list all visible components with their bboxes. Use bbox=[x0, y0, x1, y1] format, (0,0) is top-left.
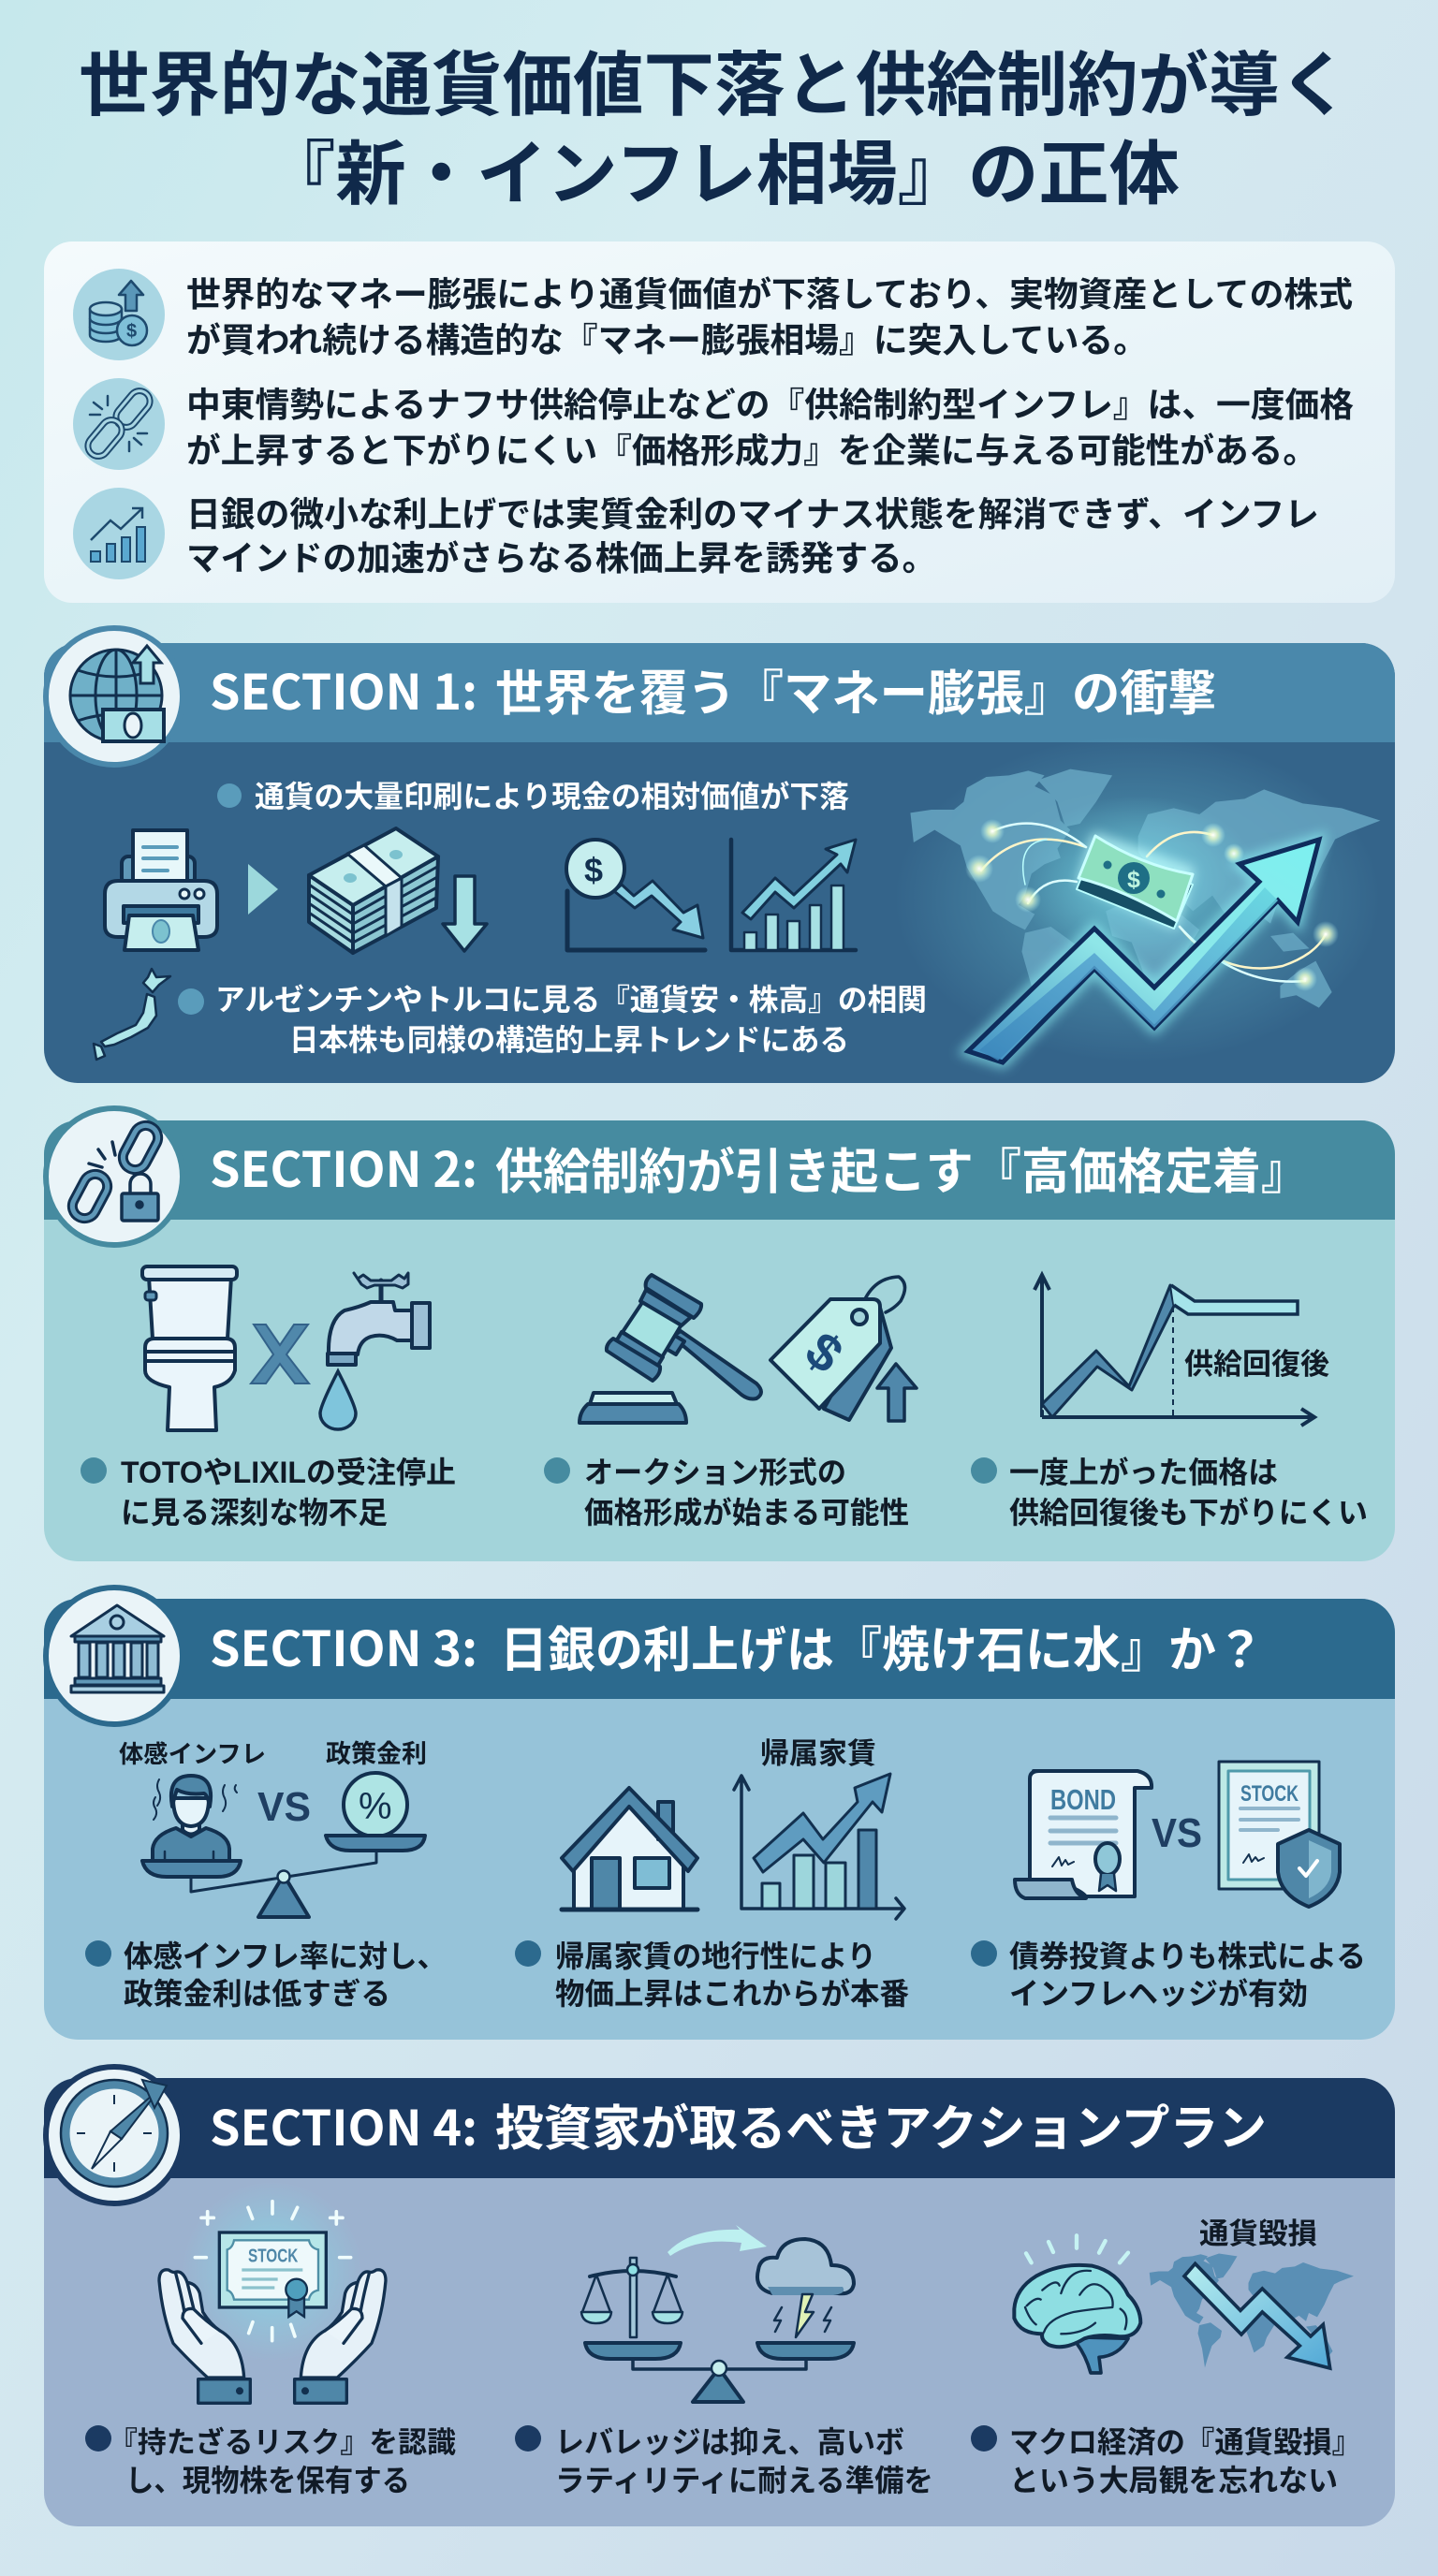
icon: coins and up arrow bbox=[73, 269, 165, 360]
icon: compass bbox=[46, 2067, 183, 2203]
bullet: auction pricing: 価格形成が始まる可能性 bbox=[584, 1496, 909, 1530]
summary point 2 bbox=[186, 386, 1354, 470]
label: felt inflation: 体感インフレ bbox=[119, 1740, 266, 1768]
label: imputed rent: 帰属家賃 bbox=[760, 1737, 876, 1770]
panel: section 4 bbox=[44, 2067, 1395, 2526]
icon: balance scale and storm cloud bbox=[581, 2225, 854, 2402]
icon: cross bbox=[251, 1325, 309, 1383]
label: VS: VS bbox=[1152, 1810, 1202, 1856]
icon: stock certificate with shield bbox=[1219, 1762, 1340, 1907]
icon: down arrow bbox=[443, 876, 487, 951]
label: VS: VS bbox=[257, 1784, 311, 1830]
summary point 1: が買われ続ける構造的な『マネー膨張相場』に突入している。 bbox=[186, 321, 1148, 359]
section 1 heading: 世界を覆う『マネー膨張』の衝撃 bbox=[495, 667, 1216, 722]
icon: falling dollar chart: $ bbox=[584, 851, 603, 889]
icon: map of Japan bbox=[94, 969, 170, 1060]
section 2 heading bbox=[210, 1131, 1309, 1201]
summary point 3: 日銀の微小な利上げでは実質金利のマイナス状態を解消できず、インフレ bbox=[186, 495, 1319, 534]
left hand bbox=[159, 2270, 250, 2403]
icon: gavel bbox=[580, 1275, 761, 1423]
icon: up arrow bbox=[877, 1364, 917, 1421]
icon: falling dollar chart bbox=[566, 840, 705, 950]
chart: price stays high after supply recovery: 供給回復後 bbox=[1184, 1348, 1329, 1381]
bullet: risk of not holding: し、現物株を保有する bbox=[125, 2464, 410, 2497]
chart: imputed rent rising bbox=[734, 1774, 904, 1919]
title: 『新・インフレ相場』の正体 bbox=[265, 135, 1180, 213]
section 3 heading: SECTION 3: bbox=[210, 1610, 477, 1680]
icon: toilet bbox=[142, 1266, 237, 1430]
summary point 3: マインドの加速がさらなる株価上昇を誘発する。 bbox=[186, 539, 936, 578]
bullet: printing: 通貨の大量印刷により現金の相対価値が下落 bbox=[255, 780, 849, 813]
icon: world map with falling arrow bbox=[1150, 2253, 1354, 2368]
bullet: stocks over bonds: 債券投資よりも株式による bbox=[1009, 1939, 1366, 1973]
icon: rising bar chart bbox=[731, 840, 856, 950]
section 2 heading: 供給制約が引き起こす『高価格定着』 bbox=[495, 1146, 1309, 1200]
section 4 heading: 投資家が取るべきアクションプラン bbox=[495, 2102, 1267, 2157]
bullet: leverage restraint: ラティリティに耐える準備を bbox=[555, 2464, 933, 2497]
icon: brain bbox=[1014, 2235, 1140, 2373]
bullet: risk of not holding: 『持たざるリスク』を認識 bbox=[109, 2426, 456, 2459]
bullet: leverage restraint: レバレッジは抑え、高いボ bbox=[555, 2425, 904, 2459]
bullet: Argentina and Turkey: 日本株も同様の構造的上昇トレンドにある bbox=[289, 1023, 849, 1057]
title: 世界的な通貨価値下落と供給制約が導く bbox=[79, 46, 1350, 124]
banknote: $ bbox=[1127, 867, 1140, 893]
summary point 1: 世界的なマネー膨張により通貨価値が下落しており、実物資産としての株式 bbox=[186, 275, 1353, 314]
icon: globe and banknote bbox=[46, 628, 183, 765]
icon: house bbox=[562, 1788, 697, 1910]
bullet: big picture: という大局観を忘れない bbox=[1009, 2464, 1338, 2497]
icon: stock certificate with shield: STOCK bbox=[1240, 1781, 1299, 1807]
icon: price tag: $ bbox=[795, 1320, 854, 1384]
bullet: TOTO and LIXIL: TOTOやLIXILの受注停止 bbox=[121, 1456, 456, 1489]
panel: section 3 bbox=[44, 1588, 1395, 2040]
bullet: Argentina and Turkey: アルゼンチンやトルコに見る『通貨安・株高』の相関 bbox=[215, 983, 927, 1017]
panel: section 2 bbox=[44, 1108, 1395, 1561]
summary point 1 bbox=[186, 275, 1353, 359]
bullet: Argentina and Turkey bbox=[178, 983, 927, 1057]
label: currency debasement: 通貨毀損 bbox=[1199, 2217, 1317, 2250]
arrow: printer to money bbox=[248, 864, 278, 915]
icon: broken chain and lock bbox=[46, 1108, 183, 1245]
bullet: risk of not holding bbox=[85, 2425, 456, 2497]
section 1 heading: SECTION 1: bbox=[210, 653, 477, 724]
bullet: auction pricing: オークション形式の bbox=[584, 1456, 846, 1489]
icon: stack of banknotes bbox=[309, 828, 438, 953]
icon: bond certificate: BOND bbox=[1050, 1783, 1116, 1816]
bullet: imputed rent lag: 帰属家賃の地行性により bbox=[555, 1939, 876, 1973]
icon: faucet bbox=[328, 1273, 430, 1365]
panel: section 3: % bbox=[359, 1786, 392, 1827]
bullet: felt inflation vs policy rate: 体感インフレ率に対し、 bbox=[124, 1939, 447, 1973]
right hand bbox=[295, 2270, 386, 2403]
icon: bars and rising line bbox=[73, 488, 165, 579]
summary point 2: 中東情勢によるナフサ供給停止などの『供給制約型インフレ』は、一度価格 bbox=[186, 386, 1354, 424]
section 3 heading bbox=[210, 1610, 1264, 1680]
icon: hands holding stock certificate: STOCK bbox=[248, 2246, 299, 2266]
section 1 heading bbox=[210, 653, 1216, 724]
bullet: big picture: マクロ経済の『通貨毀損』 bbox=[1009, 2425, 1361, 2459]
illustration: world map with money and rising arrow bbox=[894, 735, 1381, 1062]
bullet: sticky prices: 一度上がった価格は bbox=[1009, 1456, 1278, 1489]
rising arrow bbox=[968, 840, 1319, 1062]
panel: section 1 bbox=[44, 628, 1395, 1083]
section 4 heading: SECTION 4: bbox=[210, 2089, 477, 2159]
bullet: big picture bbox=[971, 2425, 1361, 2497]
bullet: sticky prices: 供給回復後も下がりにくい bbox=[1009, 1496, 1368, 1530]
icon: tilted scale, person vs interest rate bbox=[142, 1773, 425, 1917]
icon: price tag bbox=[770, 1277, 905, 1420]
icon: coins and up arrow: $ bbox=[126, 321, 137, 342]
summary point 2: が上昇すると下がりにくい『価格形成力』を企業に与える可能性がある。 bbox=[186, 432, 1317, 470]
bullet: leverage restraint bbox=[515, 2425, 933, 2497]
bullet: felt inflation vs policy rate bbox=[85, 1939, 447, 2011]
bullet: stocks over bonds bbox=[971, 1939, 1366, 2011]
bullet: auction pricing bbox=[544, 1456, 909, 1530]
banknote bbox=[1077, 836, 1193, 929]
icon: water drop bbox=[320, 1371, 356, 1429]
icon: central bank bbox=[46, 1588, 183, 1724]
summary point 3 bbox=[186, 495, 1319, 578]
bullet: TOTO and LIXIL bbox=[81, 1456, 456, 1530]
bullet: felt inflation vs policy rate: 政策金利は低すぎる bbox=[124, 1977, 390, 2011]
title bbox=[79, 46, 1350, 213]
bullet: imputed rent lag: 物価上昇はこれからが本番 bbox=[555, 1977, 909, 2011]
section 4 heading bbox=[210, 2089, 1267, 2159]
bullet: stocks over bonds: インフレヘッジが有効 bbox=[1009, 1977, 1308, 2011]
section 3 heading: 日銀の利上げは『焼け石に水』か？ bbox=[500, 1624, 1264, 1678]
section 2 heading: SECTION 2: bbox=[210, 1131, 477, 1201]
label: policy rate: 政策金利 bbox=[326, 1740, 427, 1768]
icon: hands holding stock certificate bbox=[159, 2181, 386, 2403]
bullet: TOTO and LIXIL: に見る深刻な物不足 bbox=[121, 1496, 388, 1530]
panel: summary bbox=[44, 242, 1395, 603]
chart: price stays high after supply recovery bbox=[1034, 1275, 1329, 1426]
bullet: imputed rent lag bbox=[515, 1939, 909, 2011]
icon: printer bbox=[105, 830, 217, 950]
icon: broken chain bbox=[73, 378, 165, 470]
icon: bond certificate bbox=[1015, 1771, 1152, 1898]
bullet: sticky prices bbox=[971, 1456, 1368, 1530]
